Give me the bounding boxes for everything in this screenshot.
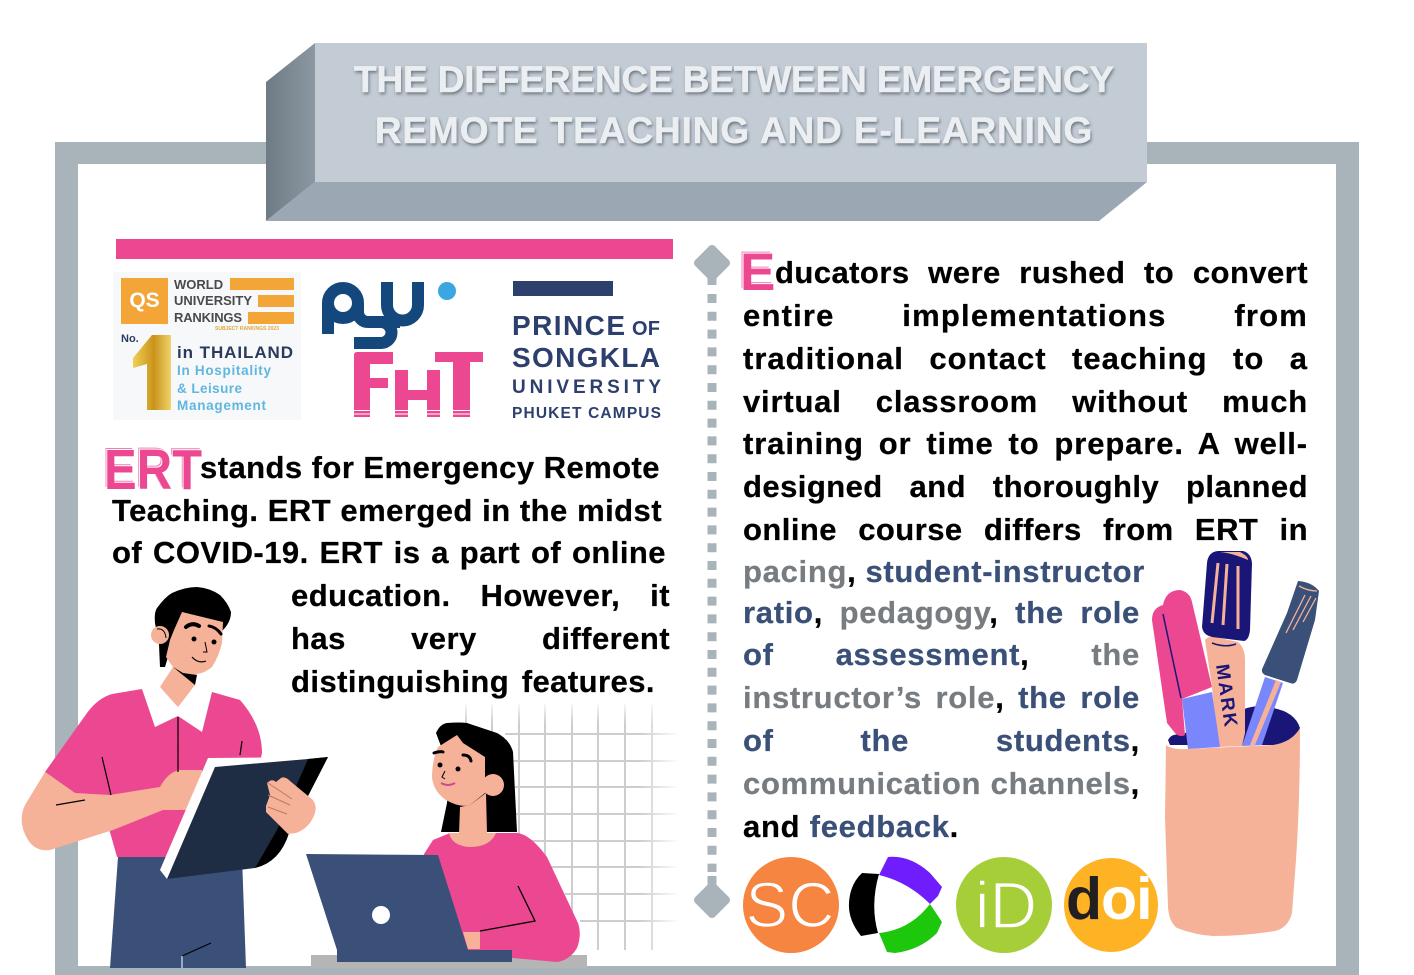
logo: tricolour play mark — [849, 857, 942, 953]
logo: SC circle — [743, 857, 839, 953]
left paragraph lines: Teaching. ERT emerged in the midst — [112, 493, 662, 528]
woman: sleeve line — [480, 886, 535, 931]
logo: QS rankings badge: Management — [177, 398, 266, 413]
logo: ORCID iD circle — [956, 857, 1052, 953]
left paragraph lines: distinguishing features. — [291, 664, 655, 699]
logo: QS rankings badge: No. — [121, 333, 139, 345]
man: shirt lines — [56, 717, 242, 805]
logo: doi circle — [1064, 858, 1158, 952]
man: trousers — [110, 857, 246, 968]
logo: ORCID iD circle: iD — [975, 868, 1037, 942]
logo: Prince of Songkla University: PHUKET CAMPUS — [512, 405, 661, 422]
right paragraph lines: training or time to prepare. A well- — [743, 426, 1308, 461]
man: tablet — [160, 757, 328, 879]
title text: REMOTE TEACHING AND E-LEARNING — [375, 110, 1093, 151]
drop letters ERT: ERT — [104, 438, 202, 502]
logo: QS rankings badge: WORLD — [174, 277, 223, 292]
logo: QS rankings badge: UNIVERSITY — [174, 293, 252, 308]
illustration: man with tablet — [22, 587, 328, 968]
man: shirt — [45, 689, 262, 857]
features list lines: pacing, student-instructor — [743, 554, 1145, 589]
woman: neck — [459, 793, 487, 834]
title banner box — [266, 43, 1147, 221]
cup — [1165, 728, 1300, 936]
logo: QS rankings badge: RANKINGS — [174, 310, 242, 325]
man: collar — [142, 685, 212, 732]
woman: hair — [436, 722, 517, 832]
left paragraph lines: education. However, it — [291, 578, 670, 613]
woman: ear — [482, 774, 504, 796]
features list lines: instructor’s role, the role — [743, 680, 1140, 715]
man: hand — [266, 777, 316, 834]
features list lines — [743, 554, 1145, 844]
right paragraph lines — [743, 255, 1308, 547]
marker — [1202, 551, 1252, 747]
logo: Prince of Songkla University — [512, 281, 661, 422]
man: neck — [160, 667, 197, 707]
right paragraph lines: online course differs from ERT in — [743, 512, 1308, 547]
man: facial features — [157, 624, 221, 662]
man: arm — [22, 770, 202, 850]
logo: Prince of Songkla University: UNIVERSITY — [512, 377, 661, 398]
outer frame — [55, 142, 1359, 975]
highlighter — [1152, 590, 1220, 749]
logo: doi circle: doi — [1066, 866, 1151, 932]
left paragraph lines: stands for Emergency Remote — [200, 450, 660, 485]
logo: QS rankings badge: in THAILAND — [177, 343, 293, 362]
woman: face — [432, 735, 485, 806]
left paragraph lines: has very different — [291, 621, 670, 656]
features list lines: of the students, — [743, 723, 1140, 758]
woman: table — [311, 955, 587, 968]
man: hair — [155, 587, 231, 667]
logo: QS rankings badge — [113, 272, 301, 420]
illustration: woman with laptop — [306, 722, 587, 968]
marker: MARK — [1211, 663, 1241, 730]
logo: SC circle: SC — [746, 869, 834, 941]
illustration: pen cup — [1152, 551, 1319, 936]
drop letter E: E — [740, 243, 775, 302]
left paragraph lines: of COVID-19. ERT is a part of online — [112, 535, 666, 570]
features list lines: ratio, pedagogy, the role — [743, 595, 1140, 630]
features list lines: and feedback. — [743, 809, 959, 844]
man: ear — [151, 626, 169, 644]
features list lines: communication channels, — [743, 766, 1140, 801]
right paragraph lines: designed and thoroughly planned — [743, 469, 1308, 504]
man: face — [166, 612, 223, 674]
right paragraph lines: traditional contact teaching to a — [743, 341, 1308, 376]
left paragraph lines — [112, 450, 670, 699]
background grid — [460, 700, 680, 955]
logo: Prince of Songkla University: SONGKLA — [512, 342, 660, 373]
man: beard — [173, 667, 197, 685]
logo: Prince of Songkla University: PRINCE — [512, 310, 625, 341]
woman: laptop — [306, 854, 512, 962]
woman: neckline — [449, 833, 496, 847]
woman: sweater — [424, 833, 580, 962]
logo: QS rankings badge: QS — [129, 289, 160, 312]
logo: PSU FHT — [328, 282, 483, 417]
logo: Prince of Songkla University: OF — [632, 318, 660, 340]
title text: THE DIFFERENCE BETWEEN EMERGENCY — [354, 59, 1114, 100]
features list lines: of assessment, the — [743, 637, 1140, 672]
logo: QS rankings badge: SUBJECT RANKINGS 2023 — [215, 326, 279, 332]
right paragraph lines: entire implementations from — [743, 298, 1308, 333]
logo: QS rankings badge: & Leisure — [177, 381, 242, 396]
logo: QS rankings badge: In Hospitality — [177, 363, 271, 378]
cup interior — [1168, 706, 1300, 745]
dotted vertical divider with diamonds — [698, 249, 726, 914]
right paragraph lines: virtual classroom without much — [743, 384, 1308, 419]
right paragraph lines: ducators were rushed to convert — [775, 255, 1308, 290]
woman: hand — [463, 932, 480, 949]
blue pen — [1242, 581, 1319, 746]
woman: facial features — [434, 752, 471, 785]
pink header bar — [116, 239, 673, 259]
